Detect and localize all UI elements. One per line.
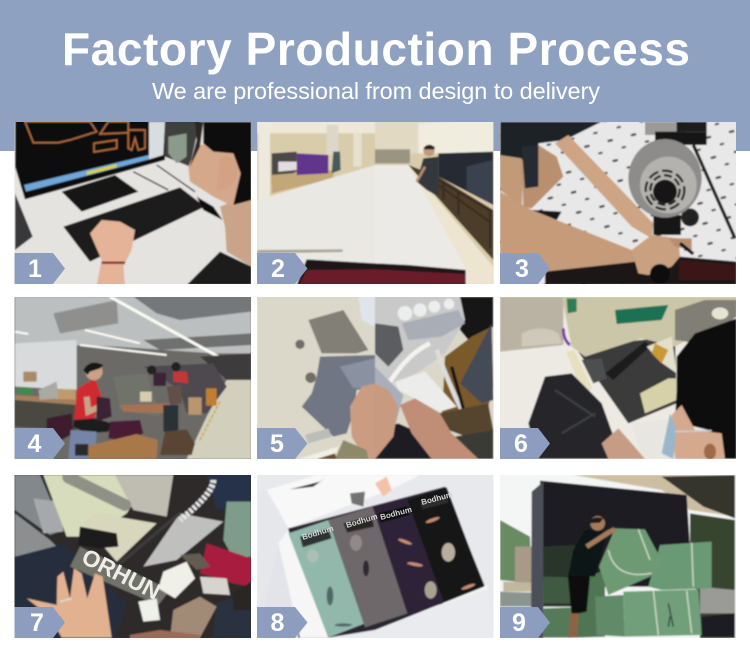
step badge 1: 1	[28, 255, 42, 283]
panel 6: flatlock stitching with black fabric	[498, 295, 738, 462]
step badge 2	[257, 253, 308, 284]
step badge 8	[257, 607, 308, 638]
step badge 1	[14, 253, 65, 284]
printed logo on waistband: ORHUN	[78, 543, 165, 605]
step badge 8: 8	[271, 609, 285, 637]
brand labels on product bands: Bodhum	[345, 512, 379, 530]
subtitle: We are professional from design to delivery	[152, 78, 600, 104]
step badge 4: 4	[28, 430, 42, 458]
panel 5: overlock stitching with grey fabric	[257, 295, 497, 462]
step badge 5	[257, 428, 308, 459]
panel 8: boxed product photo	[257, 473, 497, 642]
panel 3: cutting machine	[498, 120, 738, 287]
panel 7: logo waistband stitching	[13, 473, 253, 640]
step badge 6	[500, 428, 550, 459]
step badge 9	[500, 607, 550, 638]
step badge 7	[14, 607, 65, 638]
brand labels on product bands: Bodhum	[301, 524, 335, 542]
panel 9: loading bales onto truck	[498, 473, 738, 640]
brand labels on product bands: Bodhum	[379, 505, 413, 522]
brand labels on product bands: Bodhum	[420, 490, 454, 507]
panel 2: fabric spreading on cutting table	[257, 120, 497, 287]
step badge 5: 5	[270, 430, 284, 458]
header banner background	[0, 0, 750, 151]
step badge 2: 2	[271, 255, 285, 283]
panel 1: pattern design at computer	[13, 120, 253, 287]
step badge 7: 7	[30, 609, 44, 637]
step badge 3	[500, 253, 550, 284]
step badge 6: 6	[514, 430, 528, 458]
panel 4: sewing workshop	[13, 295, 253, 462]
step badge 9: 9	[512, 609, 526, 637]
step badge 3: 3	[515, 255, 529, 283]
step badge 4	[14, 428, 65, 459]
brand labels on product bands	[302, 493, 453, 540]
title: Factory Production Process	[62, 23, 690, 75]
